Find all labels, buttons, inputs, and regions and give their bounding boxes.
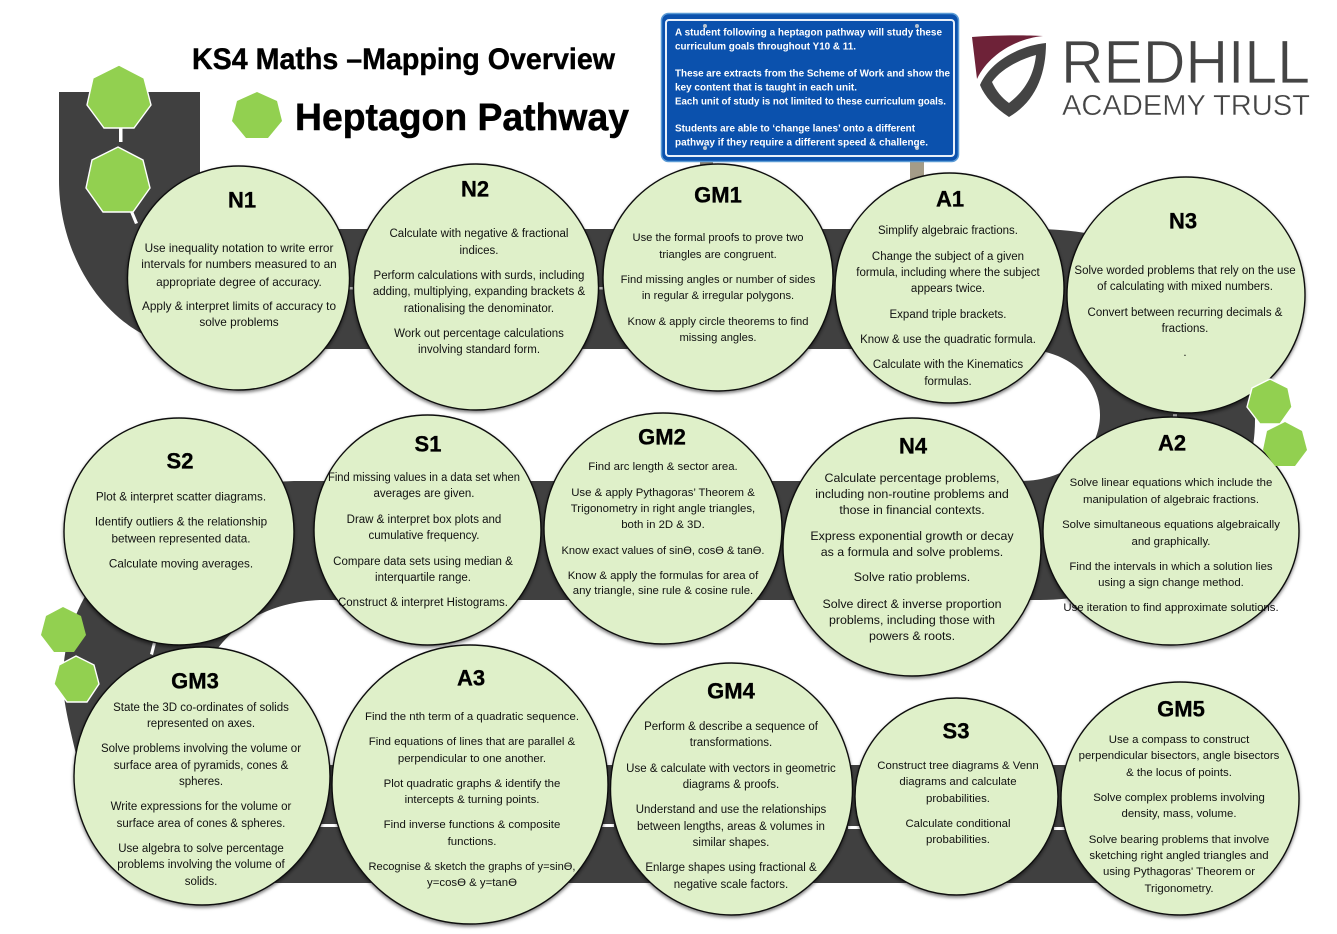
text: A2 goals: manipulation of algebraic fractions. — [1083, 494, 1259, 506]
text: A3 goals: Find inverse functions & composite — [384, 819, 560, 831]
title: KS4 Maths –Mapping Overview — [192, 43, 616, 76]
text: N4 goals: as a formula and solve problems. — [821, 545, 1003, 559]
text: GM5 goals: Solve complex problems involving — [1093, 792, 1265, 804]
sign text: pathway if they require a different speed & challenge. — [675, 138, 928, 148]
text: N4 goals: including non-routine problems and — [815, 487, 1009, 501]
text: GM4 goals: similar shapes. — [693, 837, 769, 849]
icon: road heptagon 1 — [87, 65, 151, 128]
text: S2 goals — [95, 490, 268, 570]
text: A1 goals: formulas. — [924, 376, 972, 388]
text: GM4 goals: Perform & describe a sequence of — [644, 721, 819, 733]
text: GM5 goals: density, mass, volume. — [1121, 808, 1237, 820]
text: N1 goals: intervals for numbers measured to an — [141, 257, 337, 271]
panel: A1 — [835, 173, 1064, 403]
heading: N4: N4 — [899, 434, 928, 458]
text: N4 goals: Solve direct & inverse proportion — [822, 597, 1002, 611]
text: GM5 goals: sketching right angled triangles and — [1089, 850, 1269, 862]
text: A1 goals: Change the subject of a given — [872, 251, 1024, 263]
text: GM1 goals: Use the formal proofs to prove two — [632, 232, 804, 244]
text: S1 goals: Compare data sets using median & — [333, 556, 513, 568]
text: GM5 goals — [1079, 734, 1280, 895]
text: GM2 goals — [562, 461, 764, 597]
text: N3 goals: of calculating with mixed numbers. — [1097, 281, 1273, 293]
text: A2 goals: Solve simultaneous equations algebraically — [1062, 519, 1280, 531]
text: GM3 goals: spheres. — [179, 776, 223, 788]
text: S3 goals — [877, 760, 1039, 846]
text: S2 goals: Plot & interpret scatter diagrams. — [96, 490, 266, 504]
text: S2 goals: Calculate moving averages. — [109, 558, 253, 570]
text: GM4 goals: Use & calculate with vectors in geometric — [626, 763, 836, 775]
text: N3 goals: . — [1183, 347, 1187, 359]
text: N2 goals: involving standard form. — [418, 344, 540, 356]
text: GM1 goals: in regular & irregular polygons. — [642, 290, 794, 302]
logo: Redhill Academy Trust — [972, 28, 1310, 122]
text: GM1 goals — [621, 232, 816, 344]
text: A3 goals: y=cosƟ & y=tanƟ — [427, 877, 517, 889]
panel: N3 — [1067, 177, 1305, 413]
heading: GM3: GM3 — [171, 668, 219, 694]
text: A3 goals: intercepts & turning points. — [405, 794, 539, 806]
panel: N2 — [354, 164, 598, 410]
text: GM4 goals: Understand and use the relationships — [636, 804, 827, 816]
text: N1 goals: Apply & interpret limits of accuracy to — [142, 299, 336, 313]
text: N4 goals: Express exponential growth or decay — [810, 529, 1014, 543]
heading: S3: S3 — [943, 718, 969, 744]
text: N2 goals: adding, multiplying, expanding brackets & — [373, 286, 585, 298]
text: GM4 goals: between lengths, areas & volumes in — [637, 821, 825, 833]
icon: road heptagon 4 — [1263, 422, 1307, 466]
text: A2 goals — [1062, 477, 1280, 614]
text: GM3 goals: Use algebra to solve percentage — [118, 843, 284, 855]
panel: S1 — [314, 415, 541, 645]
text: GM3 goals: solids. — [185, 876, 217, 888]
text: N1 goals: appropriate degree of accuracy. — [156, 275, 322, 289]
text: GM3 goals: surface area of pyramids, cones & — [114, 760, 289, 772]
panel: GM1 — [603, 164, 833, 391]
text: GM4 goals — [626, 721, 836, 891]
text: N2 goals — [373, 228, 585, 356]
text: GM2 goals: Know exact values of sinƟ, cosƟ & tanƟ. — [562, 545, 764, 557]
text: GM2 goals: Use & apply Pythagoras’ Theorem & — [571, 487, 755, 499]
panel: GM3 — [74, 647, 330, 905]
text: GM5 goals: Use a compass to construct — [1109, 734, 1250, 746]
heading: GM4: GM4 — [707, 678, 756, 704]
text: N3 goals — [1074, 265, 1296, 359]
heading: GM2: GM2 — [638, 424, 686, 450]
text: A1 goals: appears twice. — [911, 283, 985, 295]
logo: Redhill Academy Trust: ACADEMY TRUST — [1062, 90, 1310, 122]
text: N2 goals: Work out percentage calculations — [394, 328, 564, 340]
icon: road heptagon 3 — [1247, 379, 1292, 424]
text: A1 goals: Know & use the quadratic formula. — [860, 334, 1036, 346]
heading: GM1: GM1 — [694, 182, 742, 208]
text: GM2 goals: both in 2D & 3D. — [621, 519, 705, 531]
icon: road heptagon 6 — [54, 656, 99, 702]
text: GM1 goals: Find missing angles or number of sides — [621, 274, 816, 286]
text: S3 goals: probabilities. — [926, 793, 990, 805]
text: A1 goals: formula, including where the subject — [856, 267, 1041, 279]
heading: S1: S1 — [415, 432, 441, 456]
text: A1 goals: Calculate with the Kinematics — [873, 359, 1023, 371]
road — [59, 92, 1255, 883]
text: GM4 goals: negative scale factors. — [674, 879, 788, 891]
text: A3 goals: Find the nth term of a quadratic sequence. — [365, 711, 579, 723]
text: A3 goals — [365, 711, 579, 889]
icon: road heptagon 5 — [41, 607, 86, 652]
text: A2 goals: Find the intervals in which a solution lies — [1069, 561, 1273, 573]
text: A2 goals: using a sign change method. — [1098, 577, 1244, 589]
text: GM3 goals: Solve problems involving the volume or — [101, 743, 301, 755]
text: GM4 goals: diagrams & proofs. — [683, 779, 779, 791]
text: GM2 goals: any triangle, sine rule & cosine rule. — [573, 585, 753, 597]
text: N2 goals: Perform calculations with surds, including — [374, 270, 584, 282]
panel: A2 — [1043, 417, 1299, 645]
heading: A3: A3 — [457, 666, 485, 690]
icon: road heptagon 2 — [86, 147, 150, 212]
text: A2 goals: Solve linear equations which include the — [1070, 477, 1272, 489]
text: GM3 goals: surface area of cones & spheres. — [117, 818, 285, 830]
sign text: key content that is taught in each unit. — [675, 82, 857, 94]
logo: Redhill Academy Trust: REDHILL — [1061, 28, 1310, 96]
text: N1 goals: Use inequality notation to write error — [145, 241, 333, 255]
text: GM3 goals: State the 3D co-ordinates of solids — [113, 702, 289, 714]
text: GM2 goals: Know & apply the formulas for area of — [568, 570, 759, 582]
text: GM5 goals: Solve bearing problems that involve — [1089, 834, 1269, 846]
text: GM4 goals: Enlarge shapes using fractional & — [645, 862, 817, 874]
text: A2 goals: and graphically. — [1132, 536, 1210, 548]
text: N2 goals: indices. — [460, 245, 498, 257]
text: GM3 goals: Write expressions for the volume or — [111, 801, 291, 813]
text: N3 goals: fractions. — [1162, 323, 1208, 335]
text: N2 goals: rationalising the denominator. — [404, 303, 554, 315]
heading: A2: A2 — [1158, 430, 1186, 456]
sign text: A student following a heptagon pathway will study these — [675, 28, 942, 38]
text: A3 goals: Plot quadratic graphs & identify the — [384, 778, 560, 790]
text: A1 goals: Simplify algebraic fractions. — [878, 225, 1018, 237]
text: N2 goals: Calculate with negative & fractional — [390, 228, 568, 240]
text: GM4 goals: transformations. — [690, 737, 772, 749]
text: GM1 goals: missing angles. — [679, 332, 757, 344]
pathway heading: Heptagon Pathway — [295, 97, 629, 139]
text: A1 goals: Expand triple brackets. — [890, 309, 1006, 321]
text: S3 goals: Construct tree diagrams & Venn — [877, 760, 1039, 772]
text: GM3 goals: represented on axes. — [147, 718, 255, 730]
text: N3 goals: Solve worded problems that rely on the use — [1074, 265, 1296, 277]
text: S1 goals: cumulative frequency. — [368, 530, 480, 542]
text: S1 goals: Draw & interpret box plots and — [347, 514, 501, 526]
text: S2 goals: Identify outliers & the relationship — [95, 516, 268, 528]
text: N4 goals: powers & roots. — [869, 629, 955, 643]
panel: GM2 — [544, 413, 782, 644]
text: A1 goals — [856, 225, 1041, 388]
sign text: Each unit of study is not limited to these curriculum goals. — [675, 96, 946, 108]
text: N3 goals: Convert between recurring decimals & — [1088, 307, 1283, 319]
text: GM5 goals: perpendicular bisectors, angle bisectors — [1079, 750, 1280, 762]
heading: GM5: GM5 — [1157, 696, 1205, 722]
sign text: curriculum goals throughout Y10 & 11. — [675, 42, 856, 52]
road centre markings — [119, 128, 1177, 830]
icon: title heptagon — [232, 92, 282, 138]
text: N4 goals: Solve ratio problems. — [854, 570, 970, 584]
panel: S3 — [855, 698, 1058, 895]
text: A3 goals: perpendicular to one another. — [398, 753, 546, 765]
text: S1 goals: interquartile range. — [375, 572, 471, 584]
text: GM3 goals: problems involving the volume of — [117, 859, 286, 871]
sign text: Students are able to ‘change lanes’ onto a different — [675, 124, 916, 134]
text: GM5 goals: using Pythagoras' Theorem or — [1103, 866, 1255, 878]
text: GM5 goals: & the locus of points. — [1126, 767, 1232, 779]
text: S3 goals: diagrams and calculate — [899, 776, 1017, 788]
text: N1 goals — [141, 241, 337, 329]
text: GM1 goals: triangles are congruent. — [659, 249, 777, 261]
panel: N1 — [128, 166, 350, 390]
heading: N3: N3 — [1169, 208, 1197, 234]
text: S2 goals: between represented data. — [111, 532, 251, 546]
heading: N1: N1 — [228, 188, 256, 212]
sign text: These are extracts from the Scheme of Work and show the — [675, 68, 950, 80]
panel: S2 — [64, 418, 294, 645]
text: A2 goals: Use iteration to find approximate solutions. — [1063, 602, 1279, 614]
text: S1 goals: averages are given. — [373, 488, 475, 500]
text: N4 goals — [810, 471, 1014, 643]
panel: GM4 — [610, 663, 852, 915]
panel: N4 — [783, 418, 1041, 676]
road sign — [662, 14, 958, 184]
text: S1 goals: Find missing values in a data set when — [328, 472, 520, 484]
text: S3 goals: probabilities. — [926, 834, 990, 846]
text: S1 goals: Construct & interpret Histograms. — [338, 597, 508, 609]
text: N4 goals: problems, including those with — [829, 613, 995, 627]
text: A3 goals: Find equations of lines that are parallel & — [369, 736, 576, 748]
panel: A3 — [332, 645, 608, 924]
panel: GM5 — [1061, 682, 1299, 915]
heading: S2: S2 — [167, 448, 193, 474]
text: GM5 goals: Trigonometry. — [1144, 883, 1214, 895]
text: GM2 goals: Find arc length & sector area. — [588, 461, 738, 473]
text: A3 goals: functions. — [448, 836, 496, 848]
text: A3 goals: Recognise & sketch the graphs of y=sinƟ, — [368, 861, 576, 873]
text: GM3 goals — [101, 702, 301, 888]
text: S1 goals — [328, 472, 520, 609]
text: N4 goals: Calculate percentage problems, — [825, 471, 999, 485]
text: N1 goals: solve problems — [199, 315, 279, 329]
text: GM1 goals: Know & apply circle theorems to find — [628, 316, 808, 328]
text: N4 goals: those in financial contexts. — [839, 503, 985, 517]
text: S3 goals: Calculate conditional — [905, 818, 1011, 830]
heading: N2: N2 — [461, 176, 489, 202]
text: GM2 goals: Trigonometry in right angle triangles, — [571, 503, 755, 515]
sign text — [675, 28, 950, 148]
heading: A1: A1 — [936, 186, 964, 212]
